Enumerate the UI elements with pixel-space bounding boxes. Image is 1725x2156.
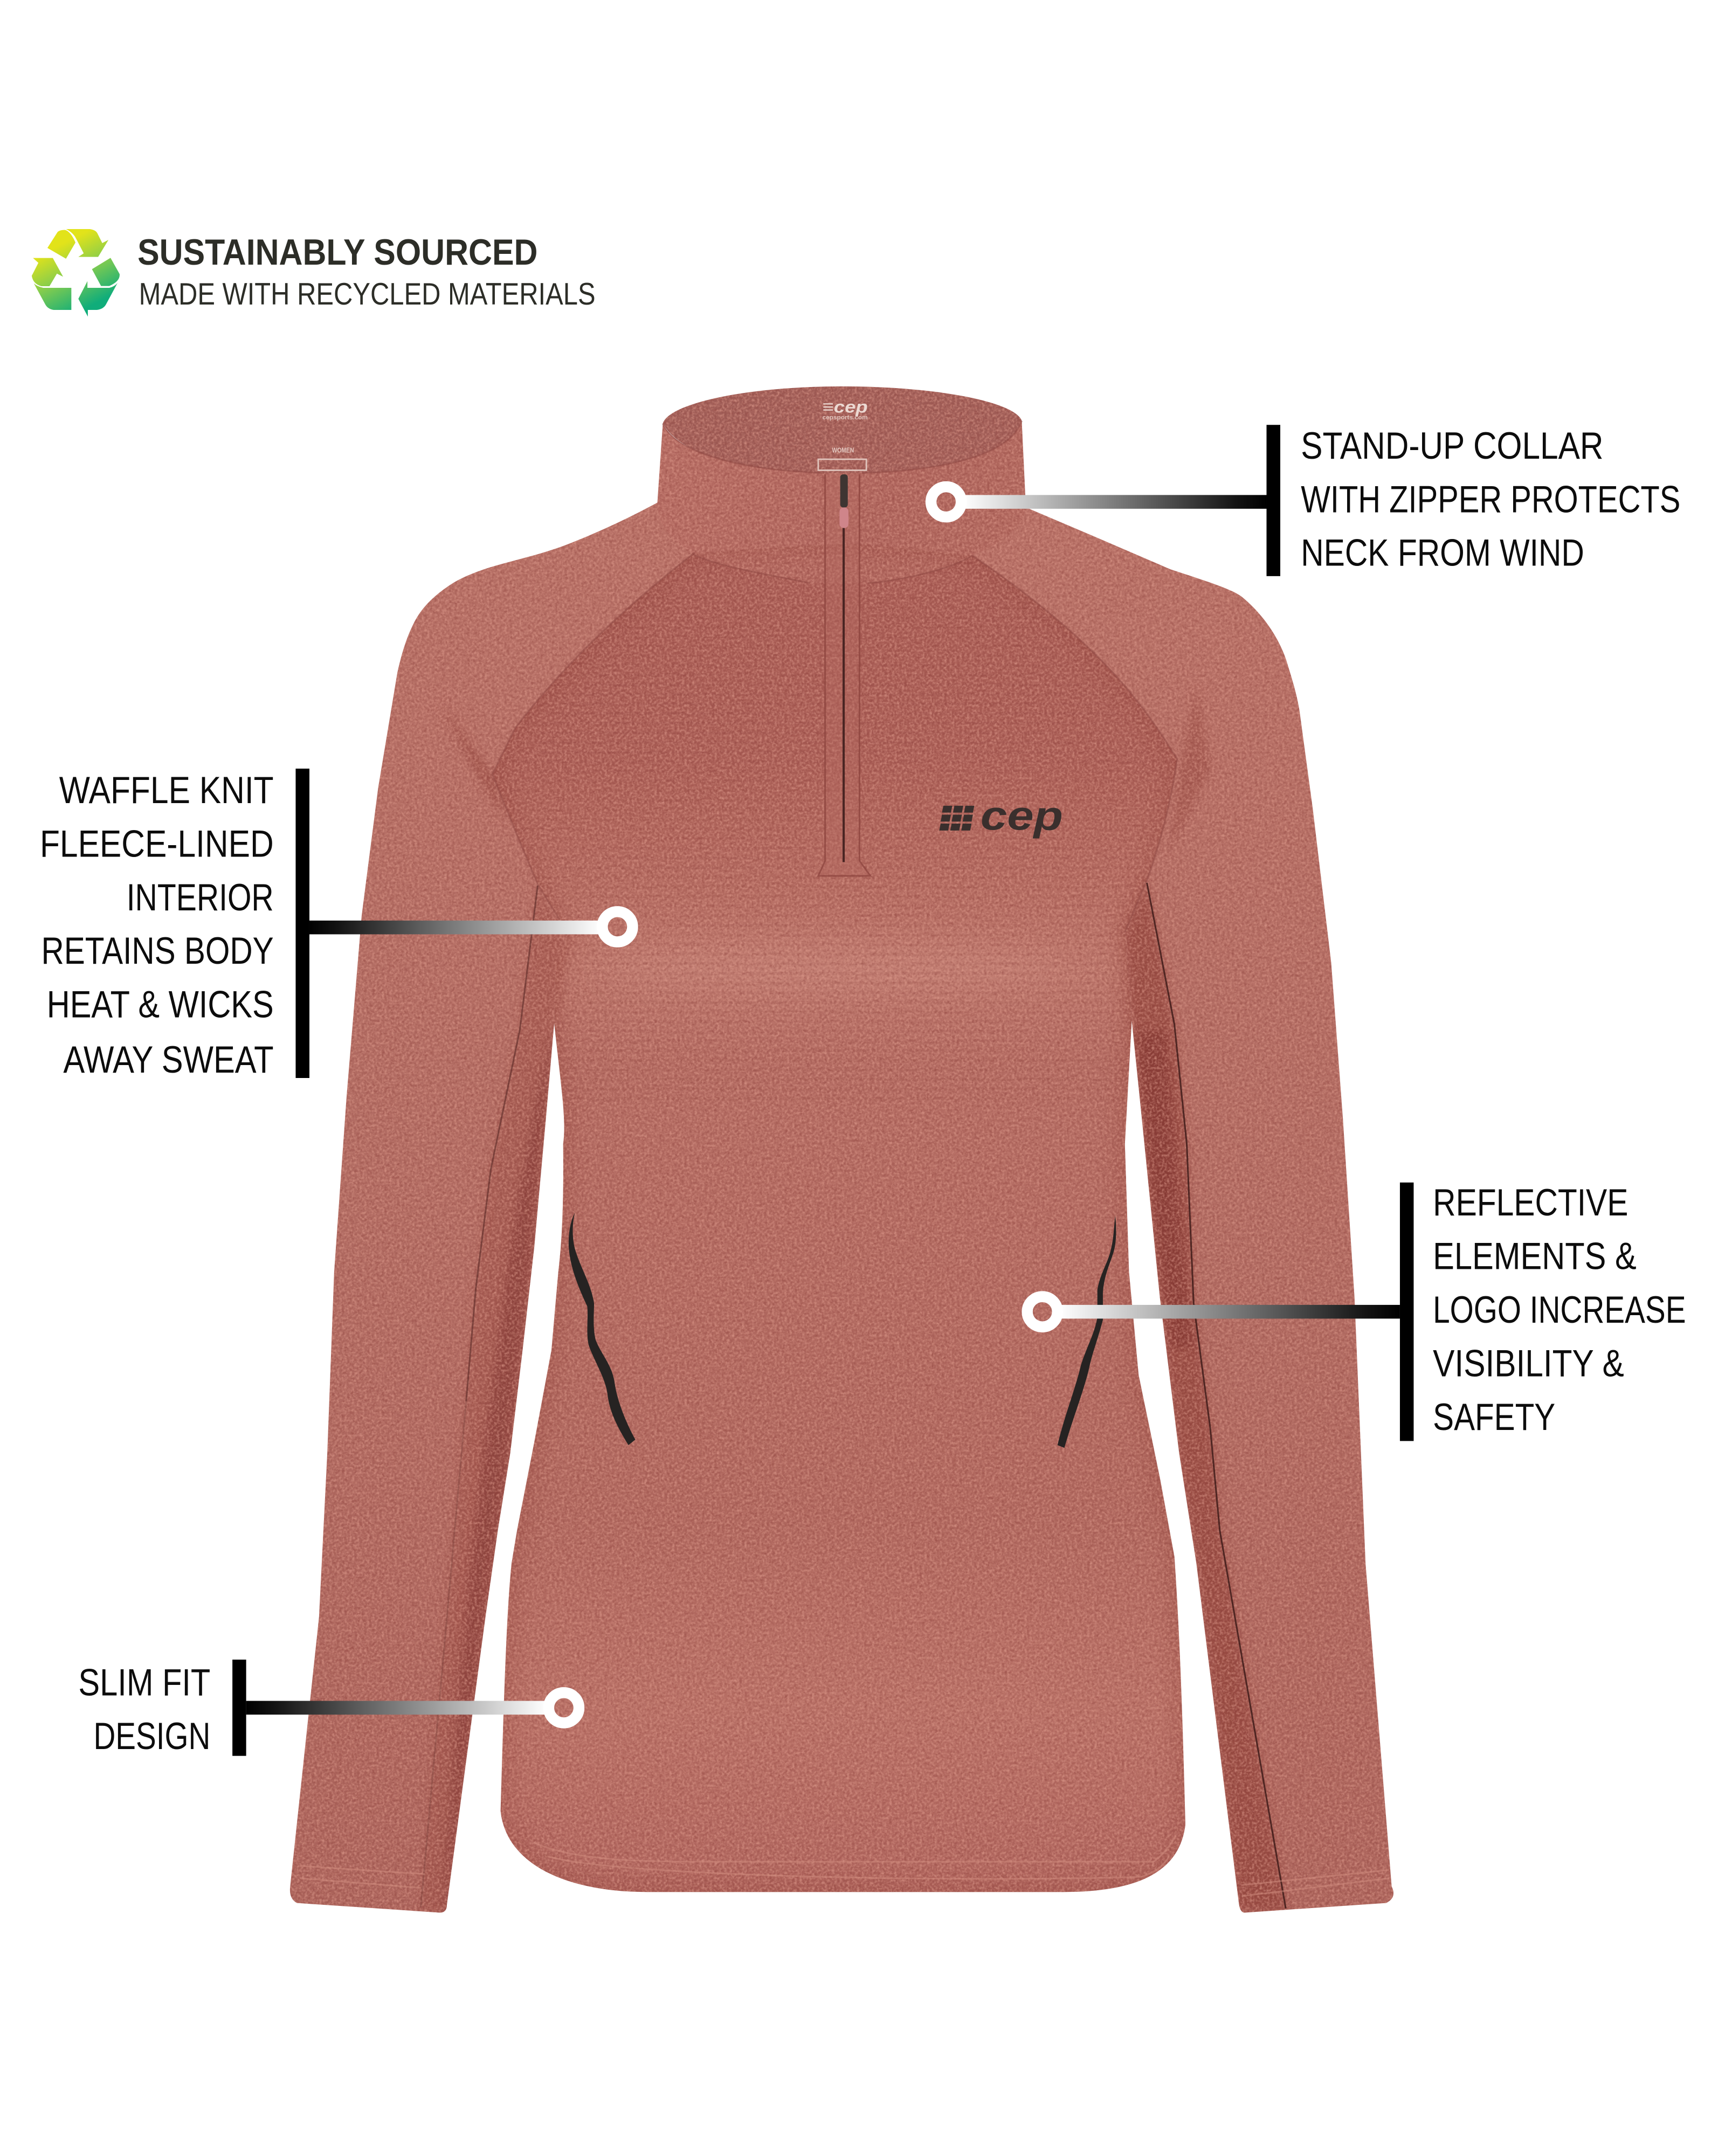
- connector bar: [1059, 1305, 1400, 1318]
- callout text: [1433, 1181, 1686, 1438]
- callout text: [78, 1661, 210, 1757]
- reflective line right: [1058, 1215, 1116, 1448]
- callout text: INTERIOR: [127, 876, 274, 918]
- callout text: SAFETY: [1433, 1395, 1555, 1438]
- body panel: [492, 543, 1185, 1892]
- callout: reflective elements: [1027, 1181, 1686, 1441]
- size label heading: WOMEN: [832, 446, 854, 454]
- callout text: FLEECE-LINED: [40, 822, 274, 865]
- callout: stand-up collar: [931, 424, 1680, 576]
- vertical bracket: [295, 769, 309, 1078]
- zipper pull: [840, 474, 848, 507]
- marker ring: [602, 911, 632, 942]
- connector bar: [309, 921, 601, 934]
- callout text: DESIGN: [93, 1715, 210, 1757]
- right sleeve: [972, 507, 1393, 1912]
- marker ring: [549, 1692, 579, 1723]
- callout text: REFLECTIVE: [1433, 1181, 1628, 1224]
- reflective line left: [569, 1213, 636, 1445]
- inner collar: [663, 386, 1022, 481]
- body edge shading: [492, 543, 1185, 1892]
- callout text: HEAT & WICKS: [47, 983, 274, 1026]
- subheading: recycled materials: MADE WITH RECYCLED MATERIALS: [139, 277, 596, 312]
- waffle knit texture: [481, 591, 1196, 1100]
- zipper tape: [843, 474, 844, 862]
- connector bar: [963, 495, 1266, 509]
- callout text: RETAINS BODY: [42, 929, 274, 972]
- sustainability badge: [32, 229, 596, 316]
- vertical bracket: [232, 1660, 246, 1756]
- chest logo: [939, 793, 1063, 839]
- size label box: [818, 459, 866, 470]
- sleeve shading panels: [421, 688, 1286, 1912]
- neck url: cepsports.com: [823, 414, 868, 421]
- callout text: NECK FROM WIND: [1301, 531, 1584, 574]
- callout: waffle knit: [40, 769, 632, 1081]
- zipper placket: [818, 474, 871, 876]
- callout text: AWAY SWEAT: [63, 1038, 274, 1081]
- callout text: ELEMENTS &: [1433, 1235, 1637, 1277]
- neck logo: ≡cep: [823, 397, 868, 416]
- callout text: SLIM FIT: [78, 1661, 210, 1703]
- icon: recycling arrows: [32, 229, 120, 316]
- logo grid: [939, 806, 974, 831]
- heading: sustainably sourced: SUSTAINABLY SOURCED: [137, 232, 537, 273]
- front collar: [657, 421, 1026, 583]
- jacket product illustration: [275, 371, 1417, 1925]
- logo wordmark: cep: [981, 793, 1063, 839]
- left sleeve: [290, 502, 694, 1912]
- vertical bracket: [1400, 1183, 1413, 1441]
- callout text: [1301, 424, 1680, 574]
- marker ring: [1027, 1297, 1058, 1327]
- zipper tab: [839, 507, 848, 528]
- raglan seams: [300, 421, 1389, 1909]
- callout text: [40, 769, 274, 1081]
- vertical bracket: [1266, 425, 1280, 576]
- connector bar: [246, 1701, 547, 1715]
- callout: slim fit: [78, 1660, 579, 1757]
- marker ring: [931, 487, 961, 517]
- heather fabric texture: [275, 371, 1417, 1925]
- callout text: WAFFLE KNIT: [59, 769, 274, 811]
- callout text: VISIBILITY &: [1433, 1342, 1624, 1385]
- callout text: STAND-UP COLLAR: [1301, 424, 1603, 467]
- collar label: [818, 397, 868, 470]
- zipper: [818, 474, 871, 876]
